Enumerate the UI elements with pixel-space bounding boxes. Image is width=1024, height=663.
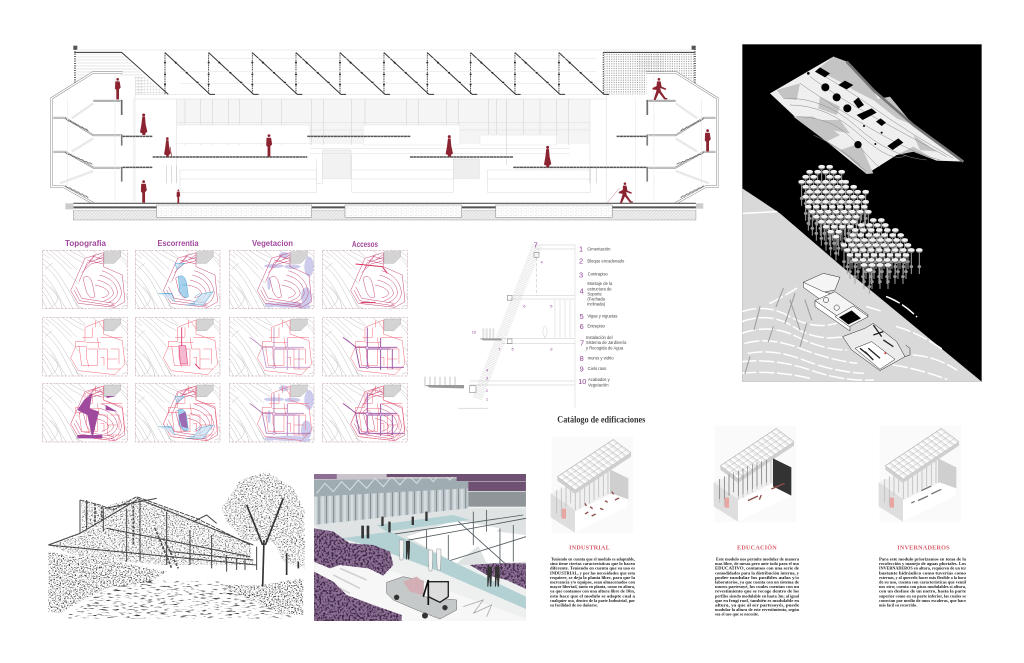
construction sequence legend: Soporte bbox=[587, 291, 603, 296]
floor slabs bbox=[123, 136, 647, 167]
text: industrial description: mayor libertad, tanto en planta, como en altura, bbox=[550, 584, 635, 589]
map: topografia row 2 bbox=[42, 317, 128, 376]
diagram callout numbers: 10 bbox=[472, 329, 477, 334]
construction detail diagram bbox=[425, 240, 627, 408]
map: topografia row 3 bbox=[42, 383, 128, 442]
text: industrial description: sino tiene ciertas características que lo hacen bbox=[550, 561, 636, 566]
text: industrial description bbox=[550, 556, 636, 608]
rendering purple plants bbox=[314, 528, 526, 621]
text: educacion description: comodidades para la distribución interna, y bbox=[715, 570, 800, 575]
text: invernaderos description: recolección y manejo de aguas pluviales. Los bbox=[879, 561, 966, 566]
text: industrial description: ya que contamos con una altura libre de 10m, bbox=[550, 589, 635, 594]
diagram callout numbers: 4 bbox=[541, 259, 544, 264]
icon: invernaderos axonometric bbox=[879, 426, 961, 522]
icon: educacion axonometric bbox=[714, 426, 796, 522]
rendering interior floor and glass walls bbox=[314, 508, 526, 565]
construction sequence legend: muros y vidrio bbox=[588, 356, 614, 361]
gray ground plane bbox=[742, 188, 982, 382]
map: vegetacion row 2 bbox=[229, 317, 314, 376]
construction sequence legend bbox=[578, 245, 627, 387]
ground floor building blocks bbox=[803, 273, 910, 371]
construction sequence legend: Bloque encadenado bbox=[587, 258, 625, 263]
pen sketch of ruins bbox=[48, 472, 305, 618]
background elevation bbox=[77, 50, 695, 202]
text: educacion description: mas libre, de mesas pero ante todo para el uso bbox=[715, 561, 799, 566]
text: industrial description: Teniendo en cuenta que el modulo es adaptable, bbox=[551, 556, 635, 562]
text: industrial description: INDUSTRIAL, y por las necesidades que esta bbox=[550, 570, 636, 575]
rendering glass walkway bbox=[342, 532, 526, 609]
catalog heading: Catálogo de edificaciones bbox=[557, 416, 646, 426]
catalog: industrial module bbox=[550, 437, 636, 608]
diagram callout numbers: 9 bbox=[550, 347, 553, 352]
diagram callout numbers: 1 bbox=[486, 397, 489, 402]
text: educacion description: perfiles siendo modulable en hasta 3m; al igual bbox=[715, 593, 800, 598]
construction sequence legend: estructura de bbox=[587, 286, 612, 291]
text: invernaderos description: más facil su recorrido. bbox=[879, 602, 917, 608]
text: invernaderos description: INVERNADEROS en altura, requieren de un tez bbox=[879, 566, 966, 571]
rendering people bbox=[361, 512, 500, 587]
text: educacion description: laboratorios, ya que cuenta con un sistema de bbox=[715, 580, 799, 584]
map column titles: Vegetacion bbox=[252, 238, 293, 248]
map: accesos row 1 bbox=[322, 250, 408, 309]
heading: educacion: EDUCACIÓN bbox=[737, 544, 777, 552]
text: educacion description: sea el uso que se necesite. bbox=[715, 612, 759, 617]
perspective rendering bbox=[314, 470, 526, 621]
map: accesos row 3 bbox=[322, 383, 408, 442]
construction sequence legend: 4 bbox=[580, 286, 584, 295]
text: educacion description bbox=[715, 556, 800, 617]
text: industrial description: esto hace que el modulo se adapte cual a bbox=[550, 593, 636, 598]
rendering upper building bbox=[314, 470, 526, 525]
map: escorrentia row 2 bbox=[135, 317, 220, 376]
construction sequence legend: (Fachada bbox=[587, 297, 606, 302]
tree columns structure bbox=[798, 165, 923, 294]
icon: industrial axonometric bbox=[551, 437, 633, 533]
text: invernaderos description: bastante hidráulico como tuverías como bbox=[879, 570, 966, 575]
construction sequence legend: y Recogida de Agua bbox=[586, 345, 624, 350]
construction sequence legend: Instalación del bbox=[586, 335, 613, 340]
text: educacion description: poder modular los posibles aulas y/o bbox=[715, 575, 799, 580]
diagram callout numbers: 7 bbox=[534, 240, 538, 249]
map: vegetacion row 3 bbox=[229, 383, 314, 442]
catalog: educacion module bbox=[714, 426, 800, 617]
map: escorrentia row 3 bbox=[135, 383, 220, 442]
map column titles bbox=[65, 238, 378, 249]
black background bbox=[742, 44, 982, 382]
facade section lines bbox=[425, 245, 575, 408]
construction sequence legend: Sistema de Jardinería bbox=[586, 340, 627, 345]
text: invernaderos description: superior como en su parte inferior, las cuales se bbox=[879, 593, 966, 598]
construction sequence legend: Cimentación bbox=[587, 246, 611, 251]
construction sequence legend: Contrapiso bbox=[588, 272, 608, 277]
construction sequence legend: 9 bbox=[580, 364, 584, 373]
heading: invernaderos: INVERNADEROS bbox=[897, 544, 950, 552]
diagram callout numbers: 6 bbox=[550, 303, 553, 308]
map column titles: Escorrentia bbox=[158, 238, 199, 248]
construction sequence legend: 6 bbox=[580, 322, 584, 331]
text: industrial description: diferente. Teniendo en cuenta que su uso es bbox=[550, 566, 635, 571]
map column titles: Accesos bbox=[352, 239, 378, 249]
text: industrial description: mercancía y/o equipos, sean almacenados con bbox=[550, 580, 636, 584]
roof truss hatching bbox=[73, 46, 696, 94]
map: vegetacion row 1 bbox=[229, 250, 314, 309]
text: invernaderos description: conectan por medio de unos escaleras, que hace bbox=[879, 598, 966, 603]
map column titles: Topografia bbox=[65, 238, 106, 248]
text: industrial description: su facilidad de no dañarse. bbox=[550, 602, 598, 608]
construction sequence legend: 1 bbox=[579, 245, 583, 254]
rendering plant bases bbox=[314, 474, 526, 621]
text: invernaderos description: nos otro; cuenta con pisos modulables si altura, bbox=[879, 584, 966, 589]
text: invernaderos description: Para este modulo priorizamos en tema de la bbox=[879, 556, 967, 562]
construction sequence legend: 10 bbox=[578, 377, 586, 386]
text: educacion description: EDUCATIVO, contamos con una serie de bbox=[715, 566, 799, 571]
construction sequence legend: 5 bbox=[580, 312, 584, 321]
text: invernaderos description bbox=[879, 556, 967, 608]
text: educacion description: Este modulo nos permite modular de manera bbox=[716, 556, 800, 562]
catalog: invernaderos module bbox=[879, 426, 967, 608]
text: educacion description: modular la altura de este revestimiento, según bbox=[715, 607, 800, 612]
construction sequence legend: Entrepiso bbox=[587, 324, 606, 329]
stair towers bbox=[52, 73, 717, 203]
cross section drawing bbox=[52, 46, 717, 220]
text: invernaderos description: de su uso, cuenta con características que vemil bbox=[879, 580, 967, 584]
map: accesos row 2 bbox=[322, 317, 408, 376]
text: educacion description: muros partesoyé, los cuales cuentan con un bbox=[715, 584, 800, 589]
map: topografia row 1 bbox=[42, 250, 128, 309]
diagram callout numbers: 4 bbox=[486, 367, 489, 372]
ground slab and foundation bbox=[65, 203, 703, 220]
diagram callout numbers: 3 bbox=[486, 375, 489, 380]
sketch stone path bbox=[68, 580, 300, 618]
text: invernaderos description: externas, y al quererlo hacer más flexible a la hora bbox=[879, 575, 967, 580]
construction sequence legend: inclinada) bbox=[587, 302, 606, 307]
ground contour lines bbox=[742, 212, 957, 380]
text: educacion description: revestimiento que se recoge dentro de los bbox=[715, 589, 799, 594]
text: educacion description: que en fengi roof, también es modulable en bbox=[715, 598, 800, 603]
construction sequence legend: 3 bbox=[579, 270, 583, 279]
construction sequence legend: Vigas y viguetas bbox=[587, 314, 618, 319]
terrain block bbox=[770, 57, 963, 174]
construction sequence legend: 8 bbox=[580, 354, 584, 363]
construction sequence legend: 2 bbox=[579, 256, 583, 265]
map: escorrentia row 1 bbox=[135, 250, 220, 309]
sketch foliage and ground texture bbox=[48, 472, 305, 615]
diagram callout numbers: 7 bbox=[498, 347, 501, 352]
heading: industrial: INDUSTRIAL bbox=[569, 544, 610, 552]
construction sequence legend: Montaje de la bbox=[587, 281, 613, 286]
sketch tree trunks bbox=[247, 498, 298, 587]
rendering truck bbox=[387, 577, 492, 619]
construction sequence legend: 7 bbox=[580, 338, 584, 347]
exploded axonometric panel bbox=[742, 44, 982, 382]
diagram callout numbers bbox=[472, 240, 553, 402]
sawtooth skylights bbox=[165, 52, 609, 94]
diagram callout numbers: 6 bbox=[523, 303, 526, 308]
construction sequence legend: Vegetación bbox=[588, 382, 609, 387]
text: industrial description: requiere, se deja la planta libre, para que la bbox=[550, 575, 636, 580]
diagram callout numbers: 5 bbox=[512, 347, 515, 352]
site analysis maps bbox=[42, 250, 408, 442]
diagram callout numbers: 2 bbox=[486, 388, 489, 393]
people silhouettes bbox=[115, 78, 711, 203]
text: educacion description: altura, ya que al ser partesoyés, puede bbox=[715, 602, 799, 608]
text: invernaderos description: con un desfase de un metro, hasta la parte bbox=[879, 589, 966, 594]
construction sequence legend: Cielo raso bbox=[588, 366, 607, 371]
rendering white terrace bbox=[314, 555, 526, 621]
construction sequence legend: Acabados y bbox=[588, 377, 611, 382]
text: industrial description: cualquier uso, dentro de la parte Industrial, por bbox=[550, 598, 635, 603]
